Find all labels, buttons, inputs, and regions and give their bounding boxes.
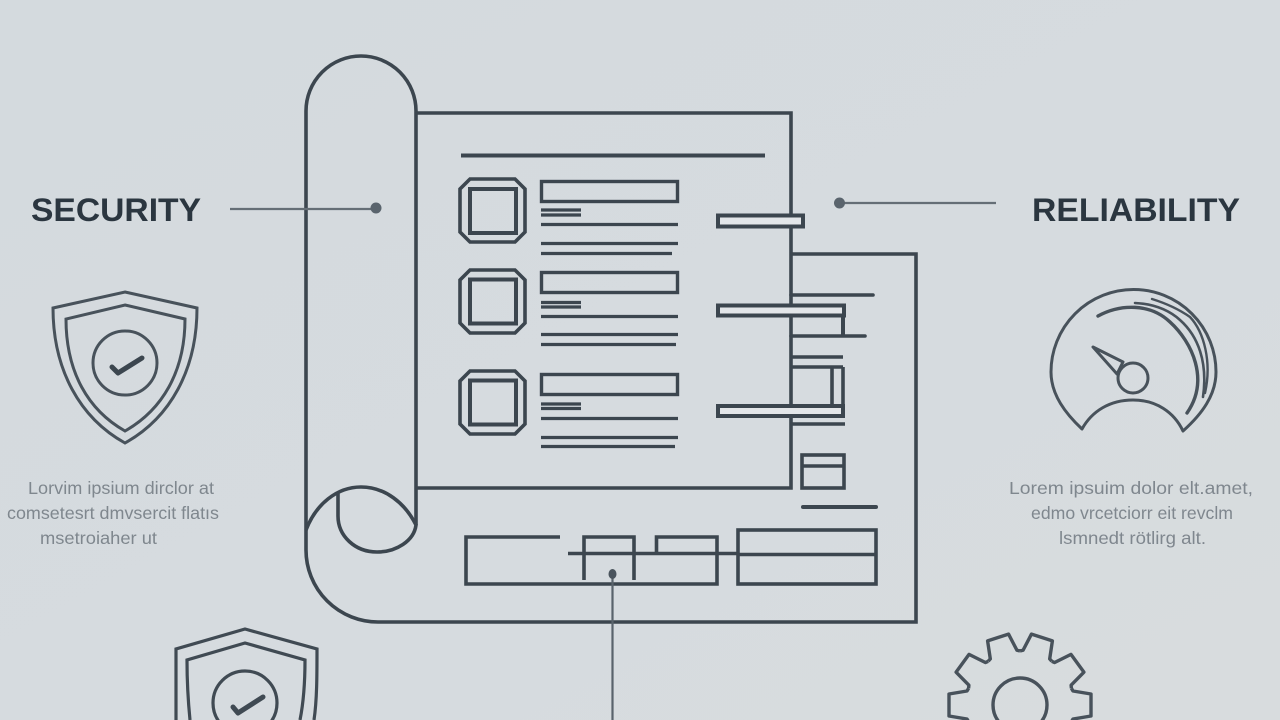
text block: security description: msetroiaher ut — [40, 528, 157, 548]
text block: reliability description: Lorem ipsuim dolor elt.amet, — [1009, 478, 1253, 498]
reliability leader line — [834, 198, 996, 208]
list row 3 — [460, 371, 678, 446]
central document illustration — [306, 56, 916, 622]
text block: security description: Lorvim ipsium dirclor at — [28, 478, 214, 498]
page heading line — [461, 154, 765, 158]
icon: security shield — [53, 292, 197, 443]
scroll body and curl — [306, 56, 916, 622]
side note line — [803, 505, 876, 509]
list row 2 — [460, 270, 678, 344]
lower block diagram — [466, 530, 876, 584]
text block: reliability description — [1009, 478, 1253, 548]
text block: reliability description: edmo vrcetciorr eit revclm — [1031, 503, 1233, 523]
icon: lower shield — [176, 629, 317, 720]
security leader line — [230, 202, 382, 214]
small side box — [802, 455, 844, 488]
main page outline — [416, 113, 791, 488]
heading: reliability: RELIABILITY — [1032, 192, 1240, 228]
icon: reliability gauge — [1051, 290, 1216, 431]
text block: reliability description: lsmnedt rötlirg alt. — [1059, 528, 1206, 548]
text block: security description: comsetesrt dmvsercit flatıs — [7, 503, 219, 523]
bottom leader line — [608, 569, 616, 720]
text block: security description — [7, 478, 219, 548]
connector bars and side rows — [718, 216, 873, 424]
icon: gear — [949, 632, 1091, 720]
list row 1 — [460, 179, 678, 254]
heading: security: SECURITY — [31, 192, 201, 228]
